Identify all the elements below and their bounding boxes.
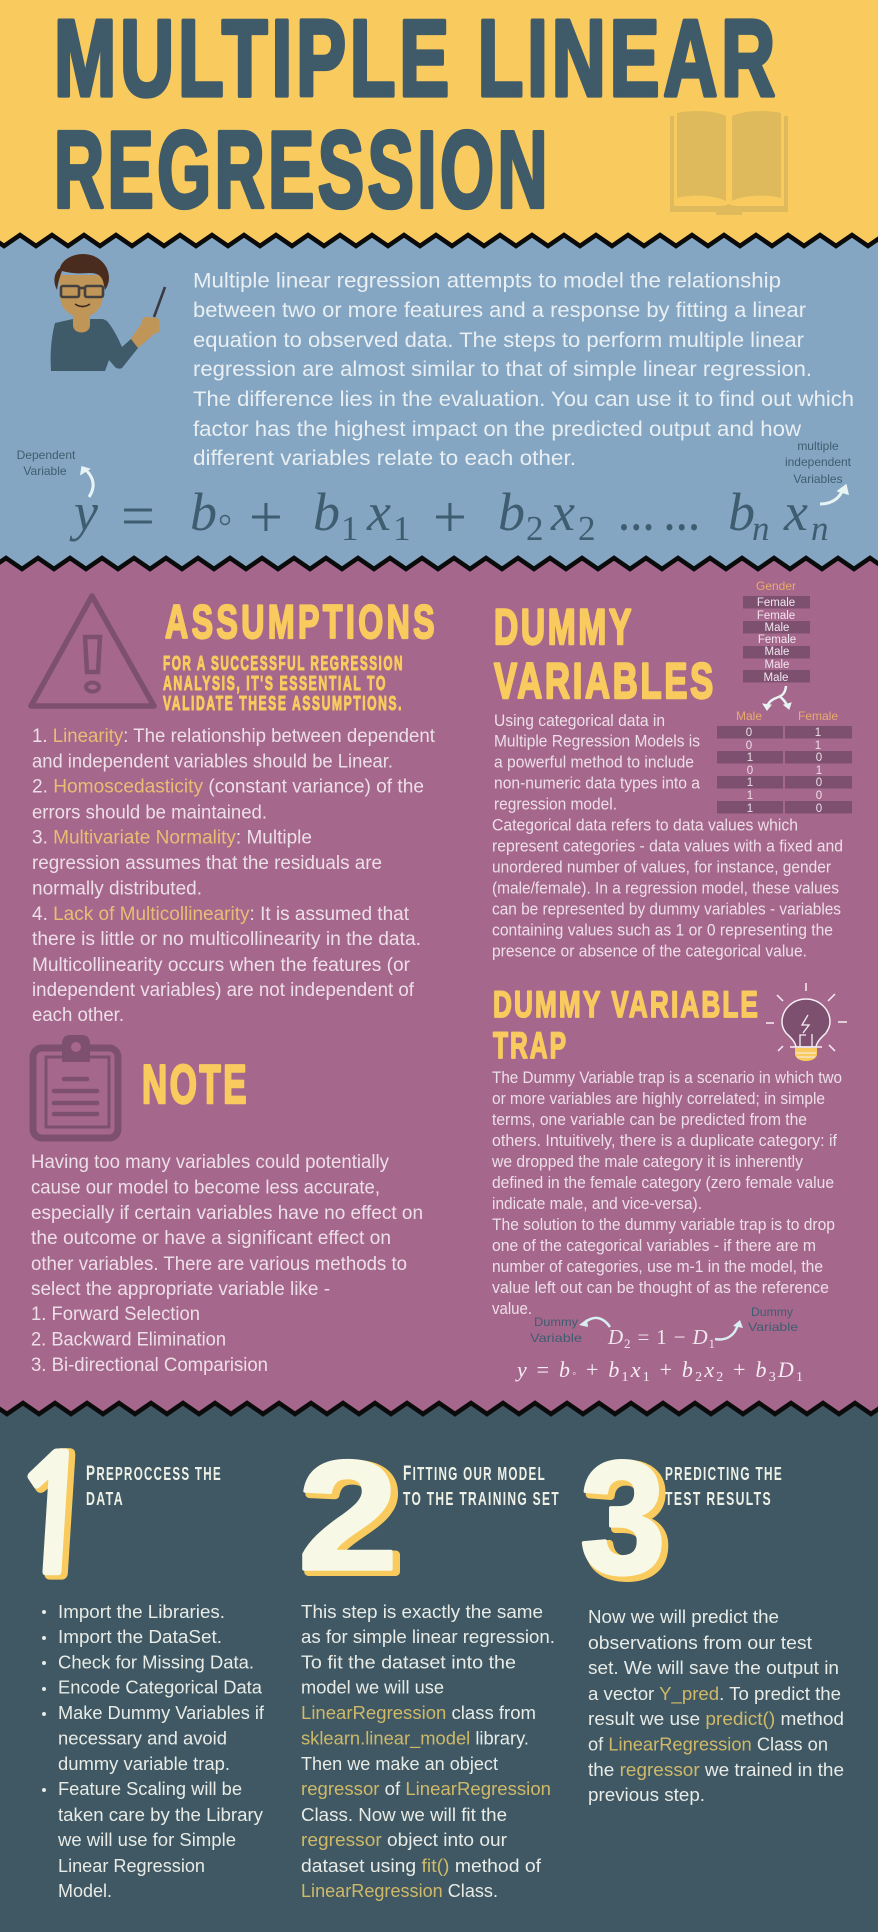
table: male and female dummy columns: 1 (815, 740, 821, 752)
equation: dummy regression: + (725, 1357, 753, 1382)
equation: dummy regression: b (756, 1357, 767, 1382)
bullet list: dummy variable trap. (58, 1753, 230, 1774)
trap text: others. Intuitively, there is a duplicate category: if (492, 1132, 837, 1150)
heading: step 2: TO THE TRAINING SET (403, 1489, 560, 1509)
dummy variables text: a powerful method to include (494, 754, 694, 772)
step 2 text (301, 1601, 555, 1901)
table: male and female dummy columns: Female (798, 709, 838, 723)
dummy variables text (492, 712, 843, 960)
annotation: dummy variable left (530, 1315, 610, 1345)
equation: multiple regression: x (366, 482, 391, 542)
heading: dummy variable trap (493, 984, 760, 1066)
annotation: multiple independent variables: independent (785, 455, 852, 469)
dummy variables text: Using categorical data in (494, 712, 665, 730)
annotation: dummy variable right (715, 1305, 798, 1339)
number 2: 2 (298, 1428, 398, 1602)
annotation: dummy variable left: Variable (530, 1331, 582, 1345)
assumptions list: independent variables) are not independent of (32, 980, 415, 1001)
equation: multiple regression: 2 (526, 509, 544, 548)
intro paragraph: Multiple linear regression attempts to model the relationship (193, 270, 781, 292)
table: gender: Male (765, 622, 789, 634)
equation: dummy regression: D (777, 1357, 794, 1382)
intro paragraph: equation to observed data. The steps to perform multiple linear (193, 329, 804, 352)
heading: step 2 (403, 1462, 560, 1509)
intro paragraph: The difference lies in the evaluation. You can use it to find out which (193, 388, 854, 411)
trap text: The solution to the dummy variable trap is to drop (492, 1216, 835, 1234)
table: male and female dummy columns: 0 (816, 790, 822, 802)
assumptions list: each other. (32, 1005, 124, 1026)
equation: d2: = 1 − (631, 1325, 692, 1349)
table: gender: Male (764, 672, 788, 684)
bullet list: Feature Scaling will be (58, 1778, 242, 1799)
dummy variables text: regression model. (494, 796, 617, 814)
table: male and female dummy columns: Male (736, 709, 762, 723)
annotation: dummy variable left: Dummy (534, 1315, 578, 1329)
icon: presenter with pointer (51, 254, 165, 371)
subheading: FOR A SUCCESSFUL REGRESSION (163, 653, 404, 675)
note body: 3. Bi-directional Comparision (31, 1355, 268, 1376)
panel: step 2 (298, 1428, 560, 1901)
equation: multiple regression: n (811, 509, 828, 548)
note body: select the appropriate variable like - (31, 1279, 330, 1300)
equation: multiple regression: n (752, 509, 770, 548)
equation: multiple regression: b (313, 482, 340, 542)
heading: dummy variable trap: TRAP (493, 1025, 568, 1066)
equation: multiple regression: … … (618, 494, 700, 539)
table: male and female dummy columns: 1 (747, 752, 753, 764)
note body (31, 1152, 423, 1376)
annotation: dependent variable: Variable (23, 464, 67, 478)
heading: step 1: DATA (86, 1489, 124, 1509)
dummy variables text: unordered number of values, for instance, gender (492, 858, 831, 876)
bullet list (42, 1601, 265, 1901)
table: male and female dummy columns: 1 (747, 790, 753, 802)
heading: dummy variable trap: DUMMY VARIABLE (493, 984, 760, 1025)
assumptions list: errors should be maintained. (32, 802, 267, 823)
step 3 text: a vector Y_pred. To predict the (588, 1683, 841, 1705)
table: gender: Female (757, 597, 795, 609)
assumptions list: 1. Linearity: The relationship between dependent (32, 726, 436, 747)
equation: multiple regression: x (783, 482, 808, 542)
assumptions list: normally distributed. (32, 879, 202, 900)
step 2 text: Class. Now we will fit the (301, 1804, 507, 1825)
equation: multiple regression: 1 (393, 509, 410, 548)
equation: multiple regression: + (249, 484, 283, 550)
equation: dummy regression: x (703, 1357, 714, 1382)
bullet list: Import the Libraries. (58, 1601, 225, 1622)
trap text: or more variables are highly correlated; in simple (492, 1090, 825, 1108)
number 3: 3 (584, 1432, 670, 1611)
step 3 text: Now we will predict the (588, 1606, 779, 1627)
intro paragraph: factor has the highest impact on the predicted output and how (193, 418, 802, 441)
table: male and female dummy columns: 0 (746, 740, 752, 752)
bullet list: Import the DataSet. (58, 1626, 222, 1647)
intro paragraph: between two or more features and a response by fitting a linear (193, 299, 806, 322)
equation: multiple regression: x (550, 482, 575, 542)
table: male and female dummy columns: 0 (746, 727, 752, 739)
step 2 text: as for simple linear regression. (301, 1626, 555, 1647)
assumptions list: Multicollinearity occurs when the features (or (32, 955, 411, 976)
table: gender: Female (757, 610, 795, 622)
table: male and female dummy columns (717, 709, 852, 815)
table: gender: Male (765, 646, 789, 658)
heading: step 3: TEST RESULTS (665, 1489, 772, 1509)
equation: dummy regression: x (630, 1357, 641, 1382)
table: male and female dummy columns: 1 (816, 765, 822, 777)
equation: d2: D (607, 1325, 623, 1349)
subheading: ANALYSIS, IT'S ESSENTIAL TO (163, 673, 387, 695)
step 2 text: Then we make an object (301, 1753, 498, 1774)
bullet list: Encode Categorical Data (58, 1676, 263, 1698)
dummy variables text: represent categories - data values with a fixed and (492, 838, 843, 856)
equation: multiple regression: + (433, 484, 467, 550)
dummy variables text: Multiple Regression Models is (494, 732, 700, 750)
step 2 text: regressor of LinearRegression (301, 1778, 551, 1799)
trap text: we dropped the male category it is inherently (491, 1153, 804, 1171)
number 1: 1 (2, 1438, 102, 1598)
panel: step 3 (580, 1429, 844, 1805)
step 3 text: result we use predict() method (588, 1708, 844, 1729)
equation: dummy regression: + (652, 1357, 680, 1382)
bullet list: Make Dummy Variables if (58, 1702, 265, 1723)
equation: d2: 1 (708, 1336, 715, 1351)
bullet list: we will use for Simple (57, 1829, 236, 1850)
panel: step 1 (2, 1438, 265, 1901)
note body: other variables. There are various methods to (31, 1254, 407, 1275)
dummy variables text: non-numeric data types into a (494, 774, 701, 792)
heading: dummy variables (494, 599, 716, 709)
icon: warning triangle (31, 596, 154, 706)
table: male and female dummy columns: 0 (816, 777, 822, 789)
assumptions list: 3. Multivariate Normality: Multiple (32, 828, 312, 849)
dummy variables text: can be represented by dummy variables - variables (492, 900, 841, 918)
equation: dummy regression: 1 (796, 1370, 803, 1385)
table: male and female dummy columns: 0 (747, 765, 753, 777)
dummy variables text: containing values such as 1 or 0 representing the (492, 922, 833, 940)
table: male and female dummy columns: 1 (747, 803, 753, 815)
step 2 text: model we will use (301, 1676, 444, 1698)
equation: d2: 2 (624, 1336, 631, 1351)
panel: assumptions (31, 595, 438, 1026)
panel: note (31, 1035, 423, 1376)
heading: step 1: PREPROCCESS THE (86, 1462, 222, 1485)
step 2 text: LinearRegression class from (301, 1702, 536, 1723)
annotation: multiple independent variables: Variables (793, 472, 843, 486)
equation: dummy regression: 3 (769, 1370, 776, 1385)
equation: d2: D (691, 1325, 708, 1349)
step 3 text (588, 1606, 844, 1805)
assumptions list: regression assumes that the residuals are (32, 853, 382, 874)
equation: multiple regression: = (121, 483, 155, 549)
heading: step 3 (665, 1464, 783, 1509)
equation: dummy regression: b (682, 1357, 693, 1382)
heading: dummy variables: VARIABLES (494, 653, 716, 709)
heading: assumptions: ASSUMPTIONS (165, 595, 438, 648)
equation: dummy regression: y = b◦ + b (517, 1357, 619, 1382)
step 2 text: dataset using fit() method of (301, 1855, 542, 1876)
number 2: 2 (303, 1431, 403, 1605)
table: male and female dummy columns: 1 (747, 777, 753, 789)
step 2 text: LinearRegression Class. (301, 1880, 498, 1901)
trap text: The Dummy Variable trap is a scenario in which two (492, 1069, 842, 1087)
bullet list: Check for Missing Data. (58, 1652, 254, 1672)
bullet list: taken care by the Library (58, 1804, 264, 1825)
subheading: VALIDATE THESE ASSUMPTIONS. (163, 693, 403, 715)
assumptions list: and independent variables should be Linear. (32, 751, 393, 772)
intro paragraph (193, 270, 854, 470)
annotation: multiple independent variables: multiple (797, 439, 839, 453)
step 3 text: observations from our test (588, 1632, 812, 1653)
step 3 text: previous step. (588, 1784, 705, 1805)
assumptions list (32, 726, 436, 1026)
subheading (163, 653, 404, 715)
equation: multiple regression (69, 482, 828, 550)
annotation: dummy variable right: Dummy (751, 1305, 793, 1319)
equation: multiple regression: b (728, 482, 755, 542)
assumptions list: there is little or no multicollinearity in the data. (32, 929, 421, 950)
equation: multiple regression: y (69, 482, 98, 542)
assumptions list: 4. Lack of Multicollinearity: It is assumed that (32, 904, 410, 925)
dummy variables text: Categorical data refers to data values which (492, 816, 798, 834)
table: gender: Female (758, 634, 796, 646)
arrow: split to dummy columns (763, 686, 791, 710)
assumptions list: 2. Homoscedasticity (constant variance) of the (32, 777, 424, 798)
step 2 text: To fit the dataset into the (301, 1652, 516, 1672)
equation: dummy regression: 2 (716, 1370, 723, 1385)
step 3 text: the regressor we trained in the (588, 1759, 844, 1780)
step 2 text: This step is exactly the same (301, 1601, 543, 1622)
equation: dummy regression: 2 (695, 1370, 702, 1385)
heading: step 3: PREDICTING THE (665, 1464, 783, 1484)
trap text (491, 1069, 842, 1318)
equation: dummy regression: 1 (622, 1370, 629, 1385)
step 2 text: sklearn.linear_model library. (301, 1728, 529, 1750)
note body: especially if certain variables have no effect on (31, 1203, 423, 1224)
heading: step 1 (86, 1462, 222, 1509)
number 1: 1 (7, 1440, 106, 1600)
trap text: one of the categorical variables - if there are m (492, 1237, 816, 1255)
annotation: dependent variable: Dependent (17, 448, 76, 462)
note body: 2. Backward Elimination (31, 1330, 226, 1350)
icon: open book (670, 111, 788, 215)
trap text: value. (492, 1300, 532, 1318)
icon: light bulb (766, 983, 847, 1061)
heading: dummy variables: DUMMY (494, 599, 634, 655)
annotation: dummy variable right: Variable (748, 1320, 798, 1334)
dummy variables text: presence or absence of the categorical value. (492, 942, 807, 960)
table: gender: Gender (756, 579, 796, 593)
trap text: value left out can be thought of as the reference (492, 1279, 829, 1297)
table: male and female dummy columns: 1 (815, 727, 821, 739)
annotation: dependent variable (17, 448, 93, 497)
note body: Having too many variables could potentially (31, 1152, 389, 1173)
table: male and female dummy columns: 0 (816, 752, 822, 764)
table: male and female dummy columns: 0 (816, 803, 822, 815)
trap text: number of categories, use m-1 in the model, the (492, 1258, 823, 1276)
step 3 text: of LinearRegression Class on (588, 1734, 828, 1754)
trap text: defined in the female category (zero female value (492, 1174, 834, 1192)
intro paragraph: different variables relate to each other. (193, 447, 576, 470)
trap text: terms, one variable can be predicted from the (492, 1111, 807, 1129)
bullet list: Linear Regression (58, 1855, 205, 1876)
heading: note: NOTE (142, 1053, 249, 1115)
note body: the outcome or have a significant effect on (31, 1228, 391, 1249)
step 3 text: set. We will save the output in (588, 1657, 839, 1678)
note body: cause our model to become less accurate, (31, 1178, 380, 1199)
equation: multiple regression: b (498, 482, 525, 542)
equation: multiple regression: 2 (578, 509, 596, 548)
icon: clipboard (33, 1035, 118, 1138)
dummy variables text: (male/female). In a regression model, these values (492, 880, 839, 898)
table: gender: Male (765, 659, 789, 671)
bullet list: necessary and avoid (58, 1728, 227, 1748)
trap text: indicate male, and vice-versa). (492, 1195, 702, 1213)
equation: multiple regression: 1 (341, 509, 358, 548)
equation: dummy regression: 1 (643, 1370, 650, 1385)
heading: step 2: FITTING OUR MODEL (403, 1462, 546, 1485)
number 3: 3 (580, 1429, 666, 1608)
note body: 1. Forward Selection (31, 1304, 200, 1325)
table: gender (743, 579, 810, 684)
equation: multiple regression: b (190, 482, 217, 542)
panel: dummy variable trap (491, 983, 847, 1385)
title (54, 0, 779, 230)
panel: dummy variables (492, 579, 852, 960)
step 2 text: regressor object into our (301, 1829, 507, 1850)
bullet list: Model. (58, 1880, 112, 1901)
annotation: multiple independent variables (785, 439, 852, 504)
intro paragraph: regression are almost similar to that of simple linear regression. (193, 358, 812, 381)
